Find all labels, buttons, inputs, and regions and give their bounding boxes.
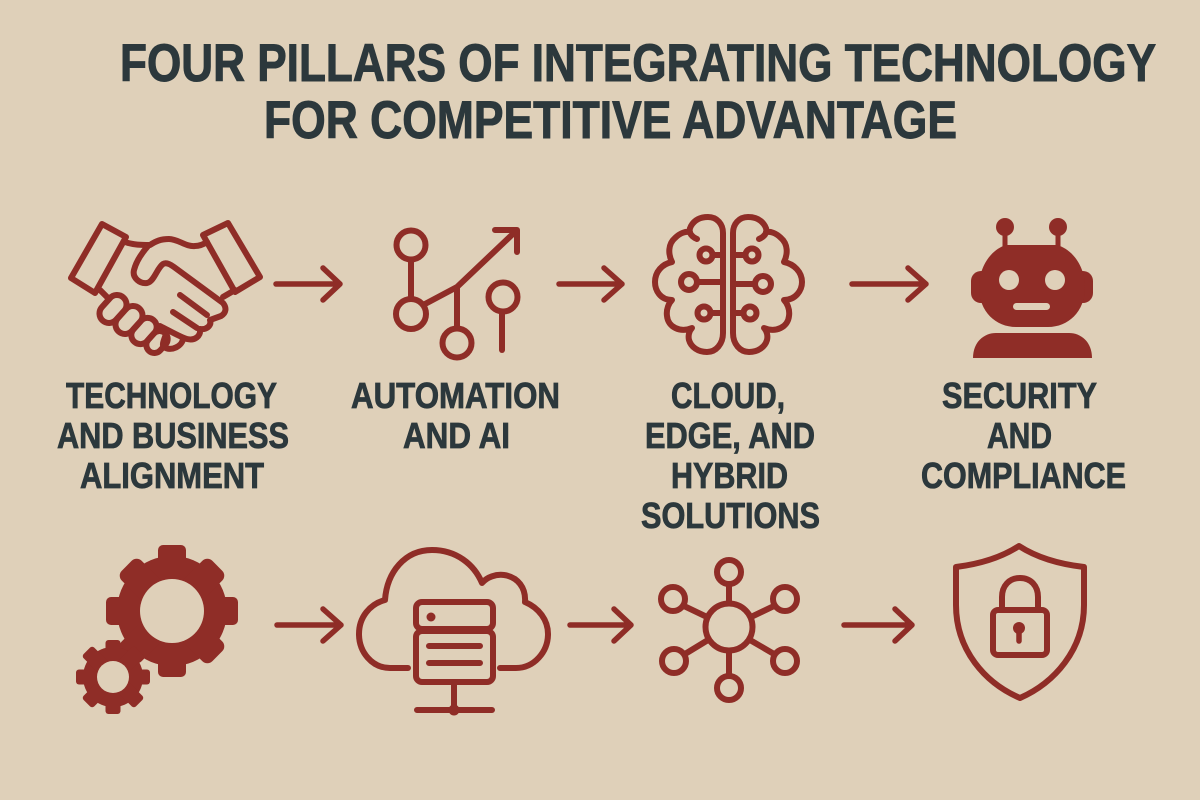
label: security and compliance: AND [987, 415, 1052, 456]
label: cloud, edge, and hybrid solutions: CLOUD, [671, 375, 785, 416]
arrow: gears to cloud [277, 609, 341, 641]
label: technology and business alignment: TECHNOLOGY [66, 375, 277, 416]
label: technology and business alignment: AND BUSINESS [57, 415, 289, 456]
arrow: brain to robot [852, 268, 926, 300]
label: technology and business alignment: ALIGNMENT [80, 455, 264, 496]
label: security and compliance: SECURITY [942, 375, 1097, 416]
label: security and compliance: COMPLIANCE [921, 455, 1126, 496]
label: cloud, edge, and hybrid solutions: HYBRID [671, 455, 788, 496]
icon: automation network with rising arrow [396, 230, 518, 358]
label: technology and business alignment [57, 375, 289, 496]
icon: circuit brain [655, 217, 802, 352]
label: automation and AI: AND AI [403, 415, 510, 456]
icon: robot [971, 218, 1093, 358]
label: automation and AI [351, 375, 560, 456]
icon: hub network [661, 560, 797, 700]
label: security and compliance [921, 375, 1126, 496]
title [120, 34, 1156, 150]
label: cloud, edge, and hybrid solutions: SOLUTIONS [641, 495, 820, 536]
title: FOR COMPETITIVE ADVANTAGE [264, 91, 957, 150]
icon: cloud server [359, 550, 548, 716]
icon: shield with padlock [956, 546, 1084, 698]
label: cloud, edge, and hybrid solutions [641, 375, 820, 536]
icon: handshake [71, 223, 260, 356]
arrow: handshake to automation [276, 268, 340, 300]
arrow: automation to brain [559, 268, 622, 300]
arrow: cloud to network [570, 609, 631, 641]
label: cloud, edge, and hybrid solutions: EDGE, AND [645, 415, 815, 456]
arrow: network to shield [844, 609, 912, 641]
icon: gears [76, 545, 238, 714]
label: automation and AI: AUTOMATION [351, 375, 560, 416]
